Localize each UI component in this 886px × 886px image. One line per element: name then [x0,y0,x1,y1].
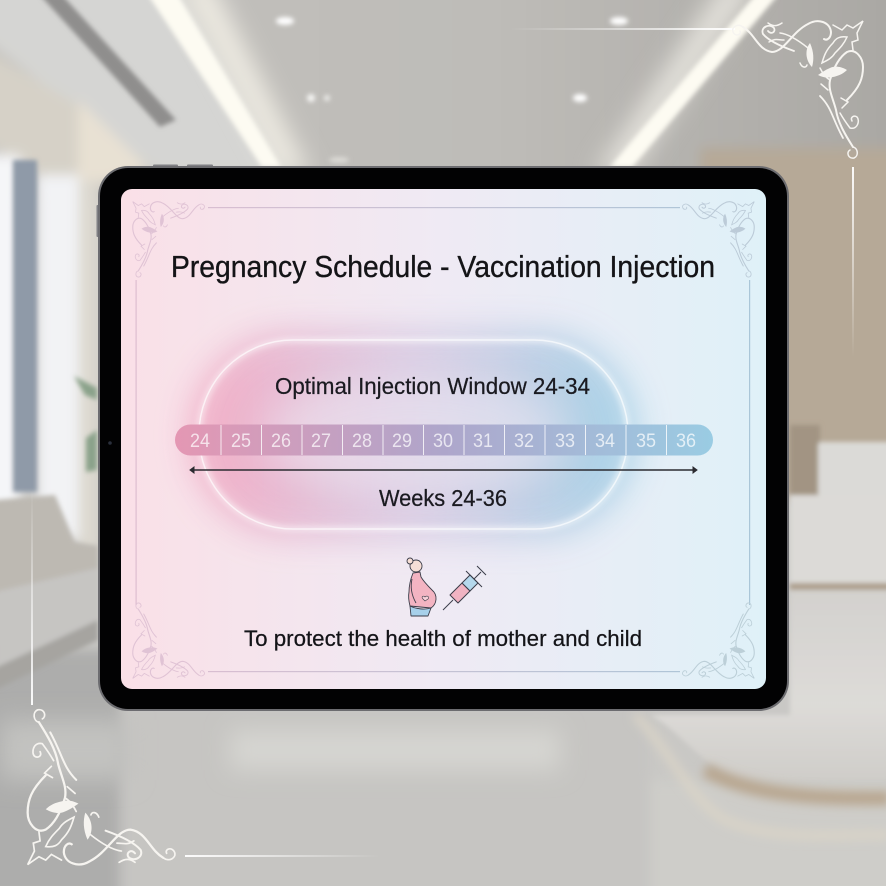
closing message: To protect the health of mother and child [244,626,642,651]
week numbers: 36 [676,431,696,452]
week numbers: 24 [190,431,210,452]
week numbers: 34 [595,431,615,452]
title: Pregnancy Schedule - Vaccination Injection [171,249,715,284]
week numbers [190,431,696,452]
double-headed arrow [190,467,697,473]
screen ornament: top right [683,202,754,277]
week numbers: 25 [231,431,251,452]
icon: syringe [443,566,486,610]
week numbers: 27 [311,431,331,452]
week numbers: 29 [392,431,412,452]
screen ornament: top left [133,202,204,277]
outer ornament: top right [733,21,863,158]
week numbers: 31 [473,431,493,452]
week numbers: 26 [271,431,291,452]
week numbers: 33 [555,431,575,452]
icon: pregnant woman [407,558,436,616]
week bar [175,424,713,456]
week numbers: 28 [352,431,372,452]
window label: Optimal Injection Window 24-34 [275,373,590,399]
tablet side buttons [96,164,213,237]
outer ornament: bottom left [28,710,175,865]
week numbers: 30 [433,431,453,452]
glowing window pill [190,332,636,537]
screen ornament: bottom right [683,603,754,678]
weeks label: Weeks 24-36 [379,485,507,511]
tablet device [96,164,789,711]
week separators [220,425,667,455]
week numbers: 32 [514,431,534,452]
screen ornament: bottom left [133,603,204,678]
tablet screen [121,189,766,689]
week numbers: 35 [636,431,656,452]
screen border lines [136,207,750,672]
